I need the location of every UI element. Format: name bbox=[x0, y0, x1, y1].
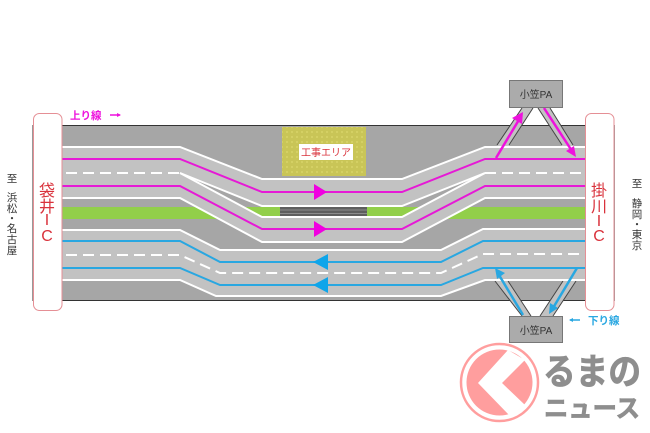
median green strips bbox=[40, 207, 600, 219]
left interchange box: C bbox=[41, 228, 53, 245]
central split wedge bbox=[180, 173, 485, 217]
magenta direction arrows bbox=[314, 184, 327, 237]
destination label left: 至 bbox=[7, 173, 17, 185]
destination label left: 屋 bbox=[7, 245, 17, 257]
right interchange box: 川 bbox=[591, 199, 607, 216]
destination label left: 浜 bbox=[7, 192, 18, 204]
left interchange box bbox=[34, 114, 62, 310]
top parking area ramps bbox=[497, 108, 574, 146]
blue parking area arrows bbox=[495, 268, 577, 315]
magenta inbound lines bbox=[40, 159, 600, 229]
right interchange box: 掛 bbox=[591, 182, 607, 200]
destination label right: 至 bbox=[632, 178, 642, 190]
destination label left bbox=[7, 173, 18, 257]
bottom parking area ramps bbox=[495, 281, 576, 316]
watermark logo: ニュース bbox=[544, 395, 640, 423]
road surface bbox=[32, 125, 615, 301]
right interchange box bbox=[586, 114, 614, 310]
destination label right bbox=[632, 178, 643, 252]
top parking area box bbox=[510, 80, 562, 108]
destination label left: 古 bbox=[7, 233, 17, 246]
blue outbound lines bbox=[40, 241, 600, 285]
right interchange box: C bbox=[593, 228, 605, 245]
median works hatch bbox=[280, 207, 367, 217]
bottom parking area box bbox=[510, 316, 562, 342]
construction area: 工事エリア bbox=[301, 146, 351, 159]
blue direction arrows bbox=[313, 254, 328, 293]
inbound label bbox=[70, 109, 121, 122]
magenta parking area arrows bbox=[496, 108, 576, 158]
destination label right: ・ bbox=[632, 219, 642, 231]
left interchange box: 袋 bbox=[39, 182, 55, 200]
construction area bbox=[282, 127, 366, 176]
left interchange box: 井 bbox=[39, 198, 55, 216]
inbound label: 上り線 bbox=[70, 109, 102, 122]
outbound label bbox=[569, 314, 620, 327]
watermark logo bbox=[461, 344, 641, 423]
destination label left: ・ bbox=[7, 213, 17, 225]
destination label right: 京 bbox=[632, 240, 642, 252]
destination label right: 東 bbox=[632, 228, 643, 241]
watermark logo: るまの bbox=[543, 351, 641, 392]
destination label left: 名 bbox=[7, 222, 17, 235]
destination label left: 松 bbox=[7, 202, 18, 215]
inbound lanes surface bbox=[40, 147, 600, 242]
left interchange box: I bbox=[45, 212, 49, 229]
white lane lines bbox=[40, 147, 600, 296]
destination label right: 岡 bbox=[632, 209, 642, 221]
top parking area box: 小笠PA bbox=[520, 88, 553, 101]
destination label right: 静 bbox=[632, 197, 643, 210]
right interchange box: I bbox=[597, 213, 601, 230]
outbound label: 下り線 bbox=[588, 314, 620, 327]
outbound lanes surface bbox=[40, 229, 600, 296]
bottom parking area box: 小笠PA bbox=[520, 324, 553, 337]
